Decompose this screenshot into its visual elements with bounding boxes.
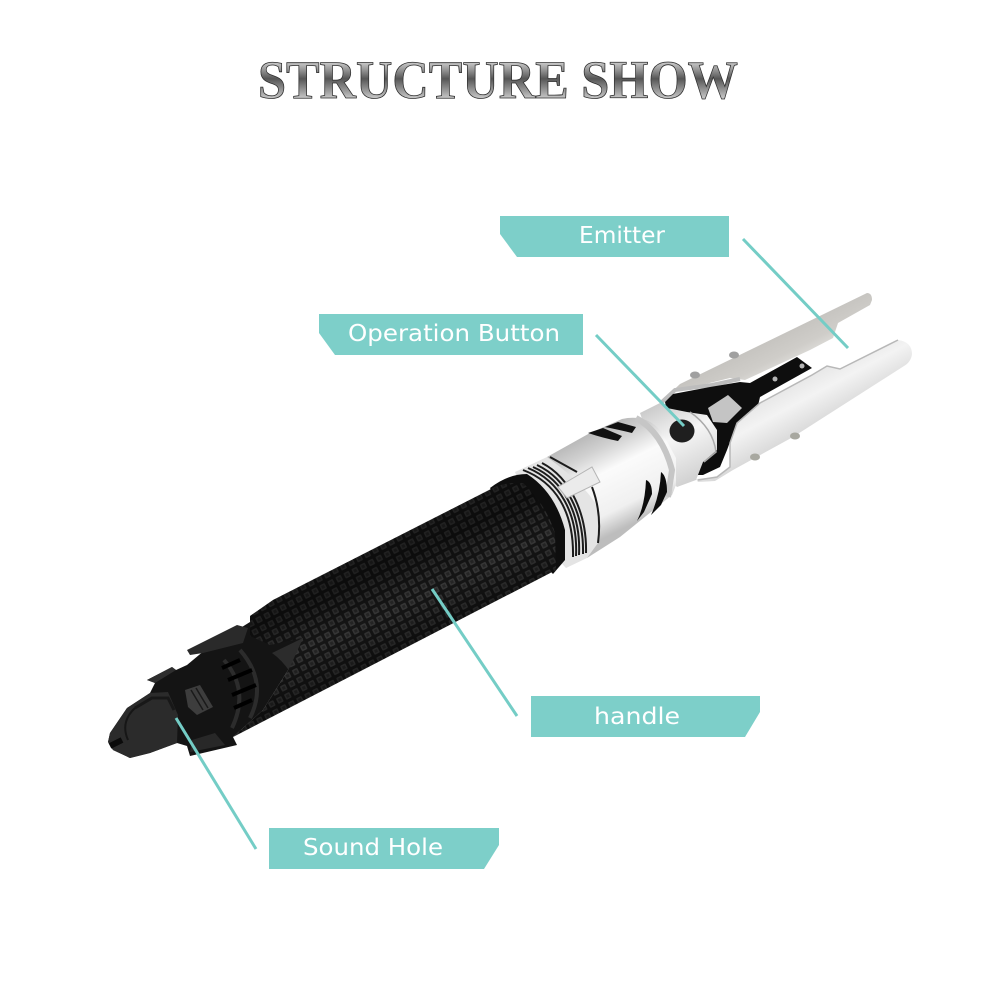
silver body [547, 418, 676, 558]
threaded collar [515, 457, 600, 568]
label: Sound Hole [269, 828, 499, 869]
label: handle: handle [594, 702, 680, 730]
label: Operation Button [319, 314, 583, 355]
label: Emitter [500, 216, 729, 257]
neck [640, 403, 717, 487]
title: STRUCTURE SHOW [258, 50, 738, 110]
operation button [670, 420, 694, 442]
emitter black core [665, 357, 812, 475]
label: handle [531, 696, 760, 737]
black ring [490, 474, 565, 574]
callout line: operation button [596, 335, 684, 426]
label: Operation Button: Operation Button [348, 319, 560, 347]
callout line: emitter [743, 239, 848, 348]
label: Emitter: Emitter [579, 221, 665, 249]
callout line: sound hole [176, 718, 256, 849]
end cap body [108, 622, 303, 758]
lightsaber illustration [108, 293, 912, 758]
label: Sound Hole: Sound Hole [303, 833, 443, 861]
knurled handle [187, 483, 556, 737]
emitter upper prong [660, 293, 872, 403]
grip tab [187, 625, 248, 655]
emitter lower prong [696, 340, 912, 482]
callout line: handle [432, 589, 517, 716]
engraved block [708, 395, 742, 423]
